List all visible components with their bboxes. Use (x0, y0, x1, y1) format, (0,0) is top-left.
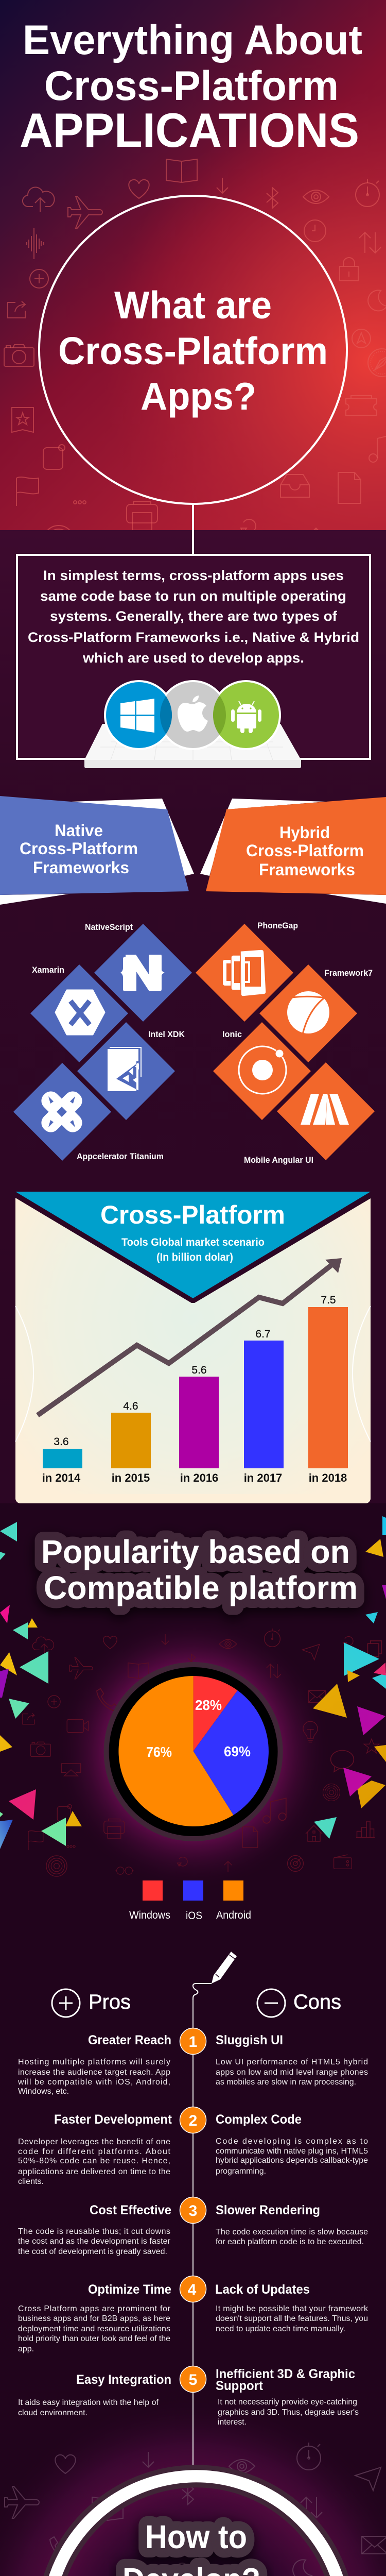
tile: Appcelerator Titanium (13, 1063, 164, 1161)
pie legend: iOS (186, 1910, 202, 1922)
bars (42, 1294, 348, 1484)
row 4: optimize time vs lack of updates: It might be possible that your framework (216, 2304, 369, 2313)
row 5: easy integration vs inefficient graphics: Inefficient 3D & Graphic (216, 2367, 355, 2381)
circle: what are cross-platform apps: Apps? (141, 375, 256, 418)
row 4: optimize time vs lack of updates: Lack of Updates (215, 2282, 310, 2297)
row 2: faster development vs complex code: programming. (216, 2167, 266, 2176)
tile: Xamarin (30, 964, 128, 1062)
banner: native frameworks: Native (55, 821, 103, 840)
heading: pros (52, 1989, 131, 2017)
circle: what are cross-platform apps: Cross-Platform (58, 329, 328, 372)
row 4: optimize time vs lack of updates: business apps and for B2B apps, as here (18, 2314, 170, 2323)
row 4: optimize time vs lack of updates: hold priority than outer look and feel of the (18, 2334, 170, 2343)
banner: native frameworks (0, 796, 194, 905)
banner: native frameworks: Cross-Platform (20, 839, 138, 858)
row 2: faster development vs complex code: 50%-80% code can be reuse. Hence, (18, 2157, 170, 2165)
tile: NativeScript: NativeScript (85, 922, 133, 932)
banner: hybrid frameworks: Cross-Platform (246, 841, 364, 860)
header panel (0, 0, 386, 556)
row 2: faster development vs complex code: code for different platforms. About (18, 2147, 171, 2156)
pie chart: 76% (146, 1744, 172, 1760)
row 3: cost effective vs slower rendering: for each platform code is to be executed. (216, 2238, 364, 2246)
header background icons (4, 159, 386, 556)
popularity section background (0, 1494, 386, 1916)
row 1: greater reach vs sluggish UI: 1 (189, 2033, 197, 2050)
banner: native frameworks: Frameworks (33, 858, 129, 877)
row 1: greater reach vs sluggish UI: will be compatible with iOS, Android, (17, 2078, 170, 2087)
row 4: optimize time vs lack of updates: Cross Platform apps are prominent for (18, 2304, 171, 2313)
icon: windows (106, 682, 172, 748)
tile: NativeScript (85, 922, 192, 1022)
definition box: same code base to run on multiple operating (40, 588, 346, 604)
banner: hybrid frameworks: Hybrid (279, 823, 330, 842)
chart heading triangle: Tools Global market scenario (121, 1236, 265, 1248)
definition box: which are used to develop apps. (82, 650, 304, 666)
row 2: faster development vs complex code: communicate with native plug ins, HTML5 (216, 2147, 368, 2156)
bars: in 2018 (309, 1471, 347, 1484)
row 3: cost effective vs slower rendering: The code is reusable thus; it cut downs (18, 2227, 170, 2236)
heading: pros: Pros (89, 1991, 131, 2013)
row 2: faster development vs complex code: 2 (189, 2112, 197, 2129)
definition box: Cross-Platform Frameworks i.e., Native & Hybrid (28, 630, 359, 645)
row 1: greater reach vs sluggish UI: Windows, etc. (18, 2087, 69, 2096)
tile: Framework7 (259, 964, 373, 1062)
pie legend (129, 1880, 251, 1922)
bars: 6.7 (255, 1328, 271, 1340)
row 2: faster development vs complex code: Code developing is complex as to (216, 2137, 368, 2146)
row 1: greater reach vs sluggish UI: as mobiles are slow in raw processing. (216, 2078, 356, 2087)
row 2: faster development vs complex code: applications are delivered on time to the (18, 2167, 170, 2176)
row 5: easy integration vs inefficient graphics (18, 2366, 359, 2427)
title: APPLICATIONS (20, 103, 359, 157)
row 1: greater reach vs sluggish UI: increase the audience target reach. App (18, 2068, 170, 2077)
platform icons on tablet (84, 680, 301, 768)
chart heading triangle (15, 1192, 371, 1303)
row 3: cost effective vs slower rendering: The code execution time is slow because (216, 2228, 368, 2236)
how to develop glow and background icons (0, 2394, 386, 2576)
row 2: faster development vs complex code: hybrid applications depends callback-type (216, 2156, 368, 2165)
chart heading triangle: Cross-Platform (100, 1200, 285, 1229)
chart heading triangle: (In billion dolar) (156, 1251, 233, 1263)
bars: in 2015 (112, 1471, 150, 1484)
row 3: cost effective vs slower rendering: 3 (189, 2202, 197, 2219)
definition box: In simplest terms, cross-platform apps uses (43, 568, 344, 583)
row 1: greater reach vs sluggish UI: Greater Reach (88, 2033, 171, 2047)
definition box (17, 555, 370, 759)
title: Everything About (23, 17, 362, 63)
bars: 5.6 (191, 1364, 207, 1376)
heading: how to develop (122, 2518, 260, 2576)
row 4: optimize time vs lack of updates: deployment time and resource utilizations (18, 2325, 170, 2333)
icon: android (213, 682, 279, 748)
row 2: faster development vs complex code: Complex Code (216, 2112, 302, 2127)
row 2: faster development vs complex code (18, 2107, 368, 2186)
tile: Intel XDK: Intel XDK (148, 1029, 185, 1039)
row 5: easy integration vs inefficient graphics: It aids easy integration with the help of (18, 2398, 159, 2407)
row 5: easy integration vs inefficient graphics: cloud environment. (18, 2409, 87, 2417)
row 5: easy integration vs inefficient graphics: 5 (189, 2371, 197, 2388)
pie chart (104, 1662, 283, 1841)
pie chart: 69% (224, 1743, 251, 1759)
title: Cross-Platform (44, 63, 339, 109)
row 4: optimize time vs lack of updates: doesn't support all the features. Thus, you (216, 2314, 368, 2323)
row 4: optimize time vs lack of updates: need to update each time manually. (216, 2325, 345, 2333)
heading: popularity: Popularity based on (41, 1533, 350, 1570)
pie legend: Android (216, 1909, 251, 1921)
title (20, 17, 362, 157)
circle: what are cross-platform apps: What are (114, 283, 272, 327)
bars: 7.5 (321, 1294, 336, 1306)
tile: Mobile Angular UI: Mobile Angular UI (244, 1155, 313, 1165)
tile: PhoneGap (196, 921, 298, 1022)
banner: hybrid frameworks: Frameworks (259, 860, 355, 879)
row 1: greater reach vs sluggish UI (17, 2028, 368, 2096)
row 3: cost effective vs slower rendering (18, 2197, 368, 2256)
row 5: easy integration vs inefficient graphics: interest. (218, 2418, 247, 2427)
row 5: easy integration vs inefficient graphics: Support (216, 2379, 264, 2393)
tile: Framework7: Framework7 (324, 968, 373, 978)
row 1: greater reach vs sluggish UI: Hosting multiple platforms will surely (18, 2058, 170, 2066)
heading: popularity: Compatible platform (44, 1569, 358, 1606)
row 2: faster development vs complex code: Faster Development (54, 2112, 172, 2127)
row 4: optimize time vs lack of updates: Optimize Time (88, 2282, 171, 2297)
bars: 3.6 (54, 1436, 69, 1448)
row 1: greater reach vs sluggish UI: Low UI performance of HTML5 hybrid (216, 2058, 368, 2066)
tile: Mobile Angular UI (244, 1062, 375, 1165)
row 4: optimize time vs lack of updates: 4 (188, 2281, 197, 2298)
row 3: cost effective vs slower rendering: the cost and as the development is faster (18, 2237, 171, 2246)
bars: in 2016 (180, 1471, 218, 1484)
bars: in 2017 (244, 1471, 282, 1484)
icon: apple (178, 696, 208, 732)
pie chart: 28% (195, 1697, 222, 1713)
row 3: cost effective vs slower rendering: Slower Rendering (216, 2203, 320, 2217)
tile: Appcelerator Titanium: Appcelerator Titanium (77, 1151, 164, 1161)
tile: Ionic: Ionic (222, 1029, 242, 1039)
pencil and timeline line (192, 1952, 237, 2471)
row 1: greater reach vs sluggish UI: Sluggish UI (216, 2033, 283, 2047)
row 4: optimize time vs lack of updates: app. (18, 2345, 34, 2353)
row 5: easy integration vs inefficient graphics: Easy Integration (76, 2372, 171, 2387)
row 5: easy integration vs inefficient graphics: It not necessarily provide eye-catching (218, 2398, 357, 2406)
tile: PhoneGap: PhoneGap (257, 921, 298, 930)
tile: Intel XDK (77, 1022, 185, 1120)
connector line (192, 504, 194, 555)
bars: in 2014 (42, 1471, 81, 1484)
trend arrow (38, 1258, 342, 1415)
panel: market bar chart (15, 1192, 371, 1503)
bars: 4.6 (123, 1400, 138, 1412)
heading: how to develop: How to (145, 2518, 247, 2555)
how to develop ring (47, 2476, 345, 2576)
circle: what are cross-platform apps (39, 196, 347, 504)
confetti triangles (0, 1516, 386, 1849)
row 4: optimize time vs lack of updates (18, 2276, 369, 2353)
row 3: cost effective vs slower rendering: Cost Effective (90, 2203, 171, 2217)
row 2: faster development vs complex code: Developer leverages the benefit of one (18, 2138, 170, 2146)
heading: cons (257, 1989, 341, 2017)
row 2: faster development vs complex code: clients. (18, 2177, 44, 2186)
tile: Xamarin: Xamarin (32, 965, 64, 975)
definition box: systems. Generally, there are two types of (50, 608, 338, 624)
row 5: easy integration vs inefficient graphics: graphics and 3D. Thus, degrade user's (218, 2408, 359, 2417)
pie legend: Windows (129, 1909, 170, 1921)
row 3: cost effective vs slower rendering: the cost of development is greatly saved. (18, 2247, 167, 2256)
tile: Ionic (213, 1022, 311, 1120)
heading: popularity (41, 1533, 358, 1606)
banner: hybrid frameworks (200, 797, 386, 904)
heading: cons: Cons (293, 1991, 341, 2013)
row 1: greater reach vs sluggish UI: apps on low and mid level range phones (216, 2068, 368, 2077)
